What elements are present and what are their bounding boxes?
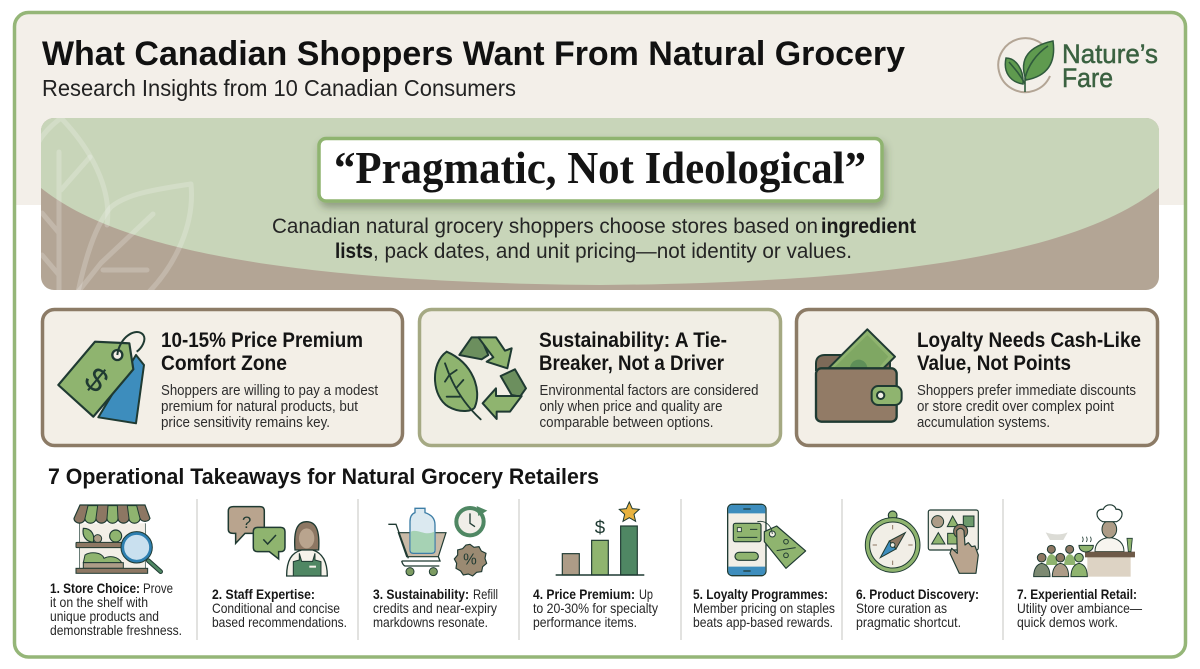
banner description	[272, 215, 916, 263]
heading	[161, 328, 363, 375]
subtitle: Research Insights from 10 Canadian Consumers	[42, 75, 516, 101]
text: Member pricing on staples	[693, 601, 835, 616]
logo: Nature's Fare	[998, 38, 1158, 93]
body text	[161, 383, 378, 431]
text: quick demos work.	[1017, 615, 1118, 630]
text	[373, 587, 498, 630]
body text: premium for natural products, but	[161, 399, 358, 415]
text: 6. Product Discovery:	[856, 587, 979, 602]
takeaway 2: staff expertise	[212, 507, 347, 630]
text: 3. Sustainability:	[373, 587, 469, 602]
body text: or store credit over complex point	[917, 399, 1114, 415]
text: Conditional and concise	[212, 601, 340, 616]
banner: key insight	[30, 118, 1159, 292]
text	[50, 581, 182, 638]
body text: Environmental factors are considered	[540, 383, 758, 399]
body text: only when price and quality are	[540, 399, 722, 415]
icon: compass and touch shape grid	[865, 510, 978, 573]
icon: market stall with magnifier	[74, 505, 161, 573]
icon: speech bubbles and staff member: ?	[242, 513, 251, 532]
section heading: 7 Operational Takeaways for Natural Grocery Retailers	[48, 464, 599, 489]
takeaway 4: price premium	[533, 502, 658, 630]
heading: Loyalty Needs Cash-Like	[917, 328, 1141, 352]
text: 2. Staff Expertise:	[212, 587, 315, 602]
heading: Breaker, Not a Driver	[539, 351, 725, 375]
text: 4. Price Premium:	[533, 587, 635, 602]
heading: Comfort Zone	[161, 351, 287, 375]
panel: sustainability	[420, 310, 780, 446]
text: pragmatic shortcut.	[856, 615, 961, 630]
text: based recommendations.	[212, 615, 347, 630]
icon: rising bar chart with star: $	[595, 516, 606, 537]
text: Store curation as	[856, 601, 947, 616]
panel: loyalty	[796, 310, 1158, 446]
takeaway 3: sustainability	[373, 506, 498, 630]
heading	[539, 328, 727, 375]
body text	[917, 383, 1136, 431]
icon: price tags	[58, 332, 144, 423]
text: Prove	[143, 581, 173, 596]
text: Refill	[473, 587, 498, 602]
body text: price sensitivity remains key.	[161, 415, 330, 431]
heading: Sustainability: A Tie-	[539, 328, 727, 352]
text: it on the shelf with	[50, 595, 148, 610]
text: 1. Store Choice:	[50, 581, 140, 596]
icon: recycle leaf	[435, 337, 526, 419]
text	[1017, 587, 1142, 630]
text	[212, 587, 347, 630]
text: 5. Loyalty Programmes:	[693, 587, 828, 602]
body text: accumulation systems.	[917, 415, 1050, 431]
logo: Nature's Fare: Nature’s	[1062, 39, 1158, 69]
text: Utility over ambiance—	[1017, 601, 1142, 616]
takeaway 6: product discovery	[856, 510, 979, 630]
icon: cart, refill jug, clock and discount badge: %	[463, 552, 477, 569]
banner description: Canadian natural grocery shoppers choose stores based on	[272, 215, 818, 238]
banner description: ingredient	[821, 215, 916, 238]
text: unique products and	[50, 609, 159, 624]
takeaway 5: loyalty programmes	[693, 504, 835, 630]
quote box: “Pragmatic, Not Ideological”	[334, 142, 866, 193]
icon: chef demo with audience	[1034, 505, 1135, 577]
heading	[917, 328, 1141, 375]
text	[693, 587, 835, 630]
icon: price tags: $	[77, 360, 115, 400]
body text: Shoppers prefer immediate discounts	[917, 383, 1136, 399]
text: markdowns resonate.	[373, 615, 488, 630]
text	[533, 587, 658, 630]
logo: Nature's Fare: Fare	[1062, 63, 1113, 93]
panel: price premium	[42, 310, 402, 446]
heading: 10-15% Price Premium	[161, 328, 363, 352]
title: What Canadian Shoppers Want From Natural Grocery	[42, 35, 905, 73]
text: performance items.	[533, 615, 637, 630]
text	[856, 587, 979, 630]
text: beats app-based rewards.	[693, 615, 833, 630]
takeaway 7: experiential retail	[1017, 505, 1142, 630]
text: to 20-30% for specialty	[533, 601, 658, 616]
body text: Shoppers are willing to pay a modest	[161, 383, 378, 399]
banner description: , pack dates, and unit pricing—not identity or values.	[373, 240, 852, 263]
takeaway 1: store choice	[50, 505, 182, 638]
text: demonstrable freshness.	[50, 623, 182, 638]
body text: comparable between options.	[540, 415, 714, 431]
text: Up	[639, 587, 653, 602]
text: 7. Experiential Retail:	[1017, 587, 1137, 602]
banner description: lists	[335, 240, 373, 263]
text: credits and near-expiry	[373, 601, 497, 616]
heading: Value, Not Points	[917, 351, 1071, 375]
body text	[540, 383, 758, 431]
icon: phone with digital tag	[728, 504, 806, 576]
icon: wallet with cash	[816, 329, 902, 422]
